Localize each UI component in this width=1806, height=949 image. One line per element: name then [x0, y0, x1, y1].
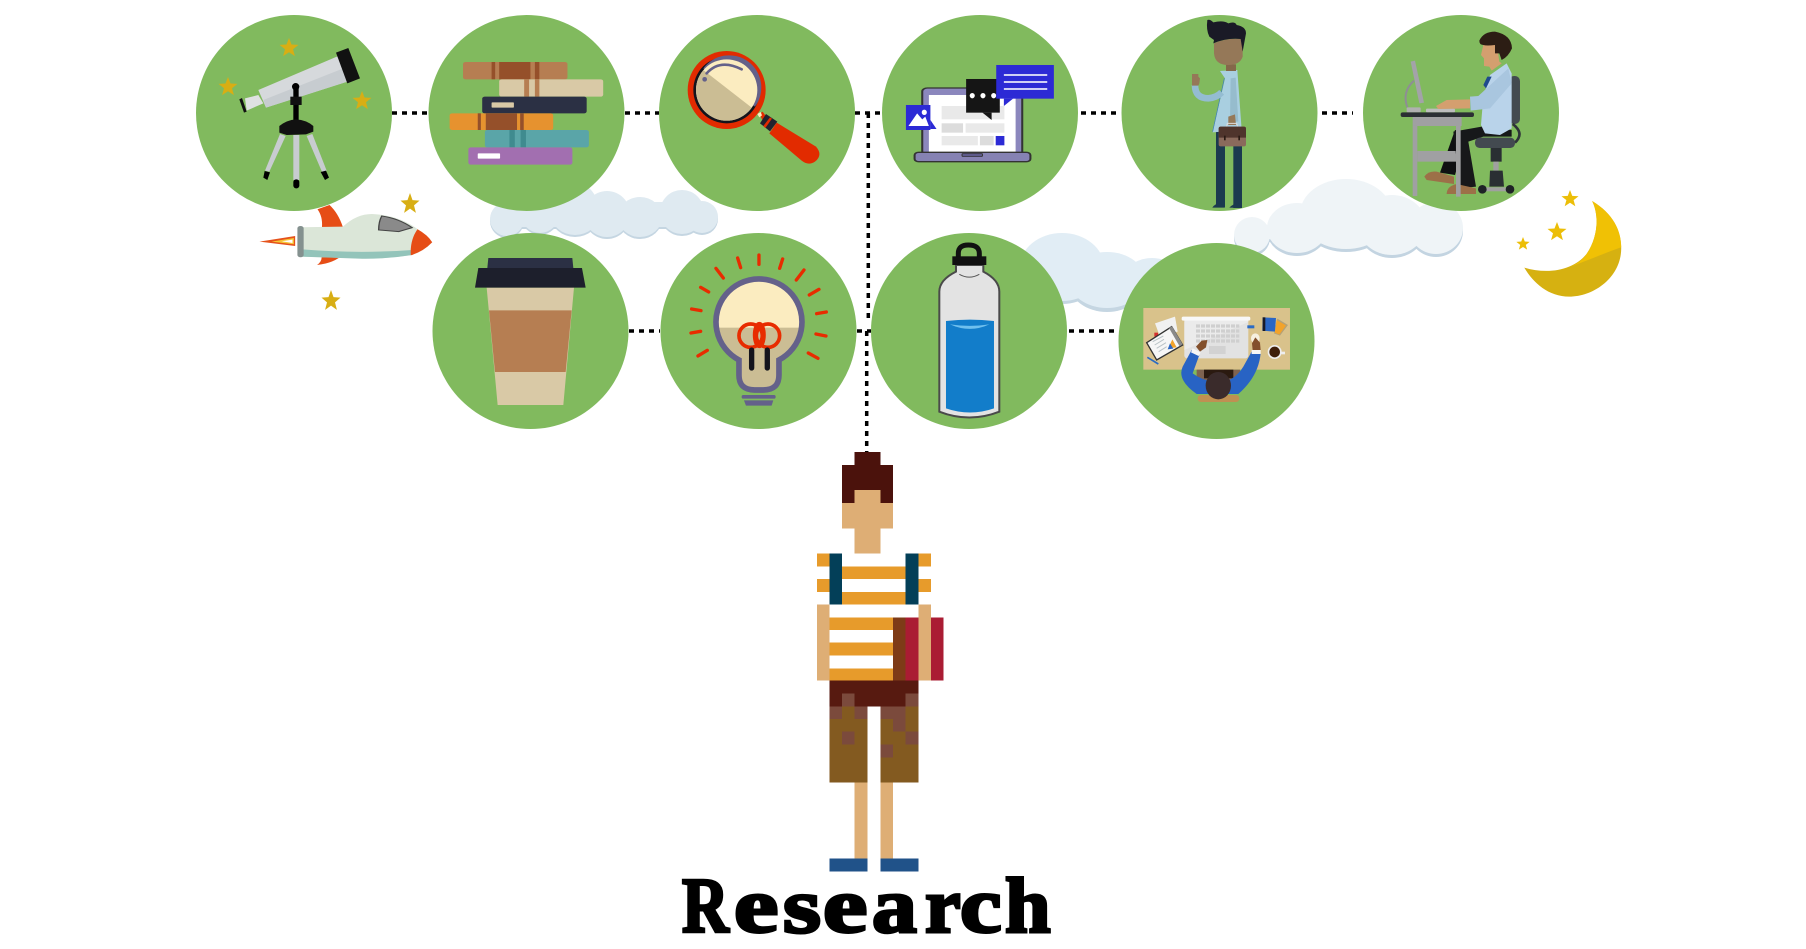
backpack straps: [830, 554, 918, 605]
title: s: [783, 862, 821, 949]
title: [682, 862, 1051, 949]
shoes: [830, 859, 918, 871]
telescope stars: [218, 38, 372, 109]
icon: light bulb: [691, 255, 826, 406]
shorts: [830, 681, 918, 782]
title: e: [734, 862, 778, 949]
face and neck: [842, 490, 893, 554]
panel: telescope: [196, 15, 392, 211]
striped shirt: [817, 554, 931, 681]
icon: water bottle: [939, 245, 999, 417]
panel: coffee cup: [432, 233, 628, 429]
icon: standing man: [1192, 20, 1246, 208]
title: e: [823, 862, 867, 949]
title: h: [1005, 862, 1051, 949]
icon: desk top view: [1143, 308, 1290, 402]
panel: man seated at desk: [1363, 15, 1559, 211]
title: c: [960, 862, 1002, 949]
rocket star lower: [322, 290, 340, 310]
cloud: behind bottle and desk: [1020, 233, 1182, 312]
panel: books: [428, 15, 624, 211]
icon: laptop: [906, 65, 1054, 162]
panel: light bulb: [660, 233, 856, 429]
arms: [817, 605, 931, 681]
panel: laptop with chat bubbles: [882, 15, 1078, 211]
infographic canvas: [196, 15, 1622, 872]
cloud: behind books: [490, 183, 718, 239]
book held under arm: [893, 617, 944, 681]
pixel-art student figure: [817, 452, 944, 871]
rocket star upper: [400, 193, 420, 213]
panel: water bottle: [871, 233, 1067, 429]
title: R: [682, 862, 729, 949]
icon: coffee cup: [475, 258, 586, 405]
legs: [855, 782, 893, 859]
hair: [842, 452, 893, 503]
moon with stars: [1516, 190, 1621, 297]
icon: seated man: [1401, 32, 1520, 197]
dotted connector lines: [392, 113, 1353, 452]
title: a: [872, 862, 917, 949]
icon: stack of books: [450, 62, 603, 165]
icon: magnifying glass: [688, 51, 819, 164]
title: r: [925, 862, 961, 949]
panel: magnifying glass: [659, 15, 855, 211]
cloud: right, behind man at desk: [1234, 179, 1463, 258]
panel: standing man with briefcase: [1122, 15, 1318, 211]
panel: person working at desk from above: [1118, 243, 1314, 439]
icon: telescope: [239, 48, 360, 188]
rocket: [259, 205, 432, 265]
